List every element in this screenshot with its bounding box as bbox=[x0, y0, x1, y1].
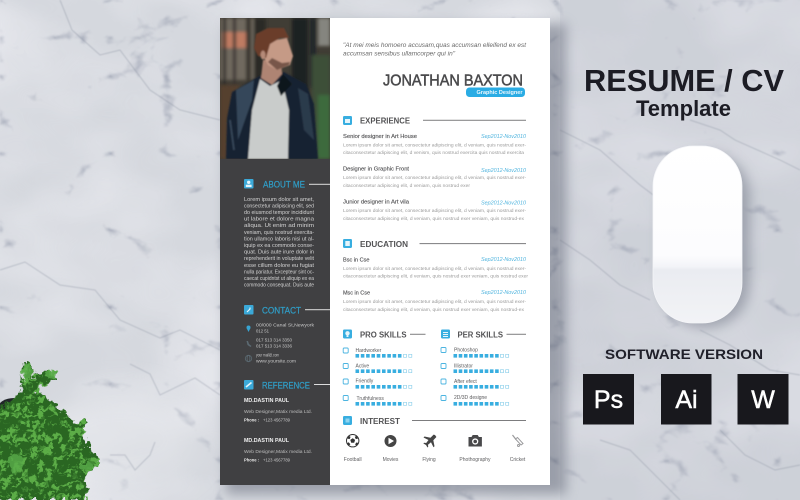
address: 012 51 bbox=[256, 328, 269, 333]
per skill list: Photoshop bbox=[454, 348, 478, 354]
pro skill list: Friendly bbox=[356, 378, 374, 384]
pro skills icon bbox=[343, 330, 352, 338]
per skill list: 2D/3D designe bbox=[454, 395, 487, 401]
job 2: citaconsectetur adipiscing elit, d veniam, quis nostrud exer bbox=[343, 183, 470, 189]
hair bbox=[254, 28, 289, 58]
experience section bbox=[343, 116, 526, 222]
education rule bbox=[420, 242, 526, 245]
about me paragraph: quat. Duis aute irure dolor in bbox=[244, 250, 314, 256]
about me paragraph: reprehenderit in voluptate velit bbox=[244, 256, 315, 262]
phone numbers: 017 513 314 3350 bbox=[256, 338, 292, 343]
face bbox=[262, 38, 293, 70]
badge: illustrator: Ai bbox=[675, 386, 698, 414]
badge: photoshop bbox=[583, 374, 634, 424]
job 1: Sep2012-Nov2010 bbox=[481, 134, 526, 140]
reference entry 2: +123 4567789 bbox=[263, 458, 290, 462]
phone numbers bbox=[256, 338, 292, 348]
mouse shadow bbox=[660, 152, 750, 328]
icon: phone bbox=[246, 341, 252, 347]
resume shadow bbox=[226, 24, 566, 494]
job 2 bbox=[343, 167, 526, 189]
badge: word: W bbox=[751, 386, 775, 414]
degree 2: Lorem ipsum dolor sit amet, consectetur adipiscing elit, d veniam, quis nostrud exer- bbox=[343, 299, 526, 305]
pro skills section bbox=[343, 330, 426, 406]
software version heading: SOFTWARE VERSION bbox=[605, 346, 763, 362]
title: resume / cv: RESUME / CV bbox=[584, 63, 784, 98]
subtitle: template: Template bbox=[636, 96, 731, 121]
about me paragraph: aliqua. Ut enim ad minim bbox=[244, 223, 314, 229]
about me connector bbox=[309, 184, 330, 185]
reference entry 1: +123 4567789 bbox=[263, 418, 290, 422]
about me paragraph: Lorem ipsum dolor sit amet, bbox=[244, 197, 314, 203]
degree 2: citaconsectetur adipiscing elit, d veniam, quis nostrud exer veniam, quis nostrud-ex bbox=[343, 307, 525, 313]
interest labels: Phothography bbox=[459, 457, 491, 463]
degree 1: Sep2012-Nov2010 bbox=[481, 257, 526, 263]
job 2: Sep2012-Nov2010 bbox=[481, 168, 526, 174]
reference connector bbox=[314, 384, 330, 385]
interest labels: Football bbox=[344, 457, 362, 463]
education section bbox=[343, 239, 528, 313]
experience icon bbox=[343, 116, 352, 125]
pro skill list bbox=[343, 348, 412, 406]
collar bbox=[277, 74, 292, 96]
interest labels: Movies bbox=[383, 457, 399, 463]
interest labels: Flying bbox=[422, 457, 436, 463]
email and website bbox=[256, 353, 296, 363]
job title pill: Graphic Designer bbox=[476, 90, 522, 96]
icon: flying bbox=[423, 435, 436, 448]
pro skills heading: PRO SKILLS bbox=[360, 330, 406, 339]
interest labels bbox=[344, 457, 526, 463]
job 2: Designer in Graphic Front bbox=[343, 167, 410, 173]
reference section bbox=[244, 379, 330, 462]
interest rule bbox=[412, 419, 526, 422]
reference entry 1: Phone : bbox=[244, 418, 259, 422]
education icon bbox=[343, 239, 352, 248]
reference entry 1 bbox=[244, 398, 312, 422]
plant bbox=[0, 362, 100, 500]
contact connector bbox=[305, 309, 330, 310]
about me paragraph: veniam, quis nostrud exercita- bbox=[244, 230, 314, 236]
sidebar panel bbox=[220, 159, 330, 485]
job 1: Senior designer in Art House bbox=[343, 134, 417, 140]
icon: white mouse bbox=[653, 146, 742, 323]
neck bbox=[261, 60, 282, 85]
pro skills rule bbox=[410, 333, 426, 336]
job title pill bbox=[466, 88, 525, 97]
interest icon bbox=[343, 416, 352, 425]
about me paragraph bbox=[244, 197, 315, 289]
quote: accumsan sensibus ullamcorper qui in" bbox=[343, 51, 456, 58]
experience heading: EXPERIENCE bbox=[360, 116, 410, 126]
email and website: your mail@.com bbox=[256, 353, 279, 358]
per skills icon bbox=[441, 330, 450, 338]
interest section bbox=[343, 416, 526, 463]
about me paragraph: ut labore et dolore magna bbox=[244, 217, 314, 223]
badge: word bbox=[738, 374, 788, 424]
per skill list: After efect bbox=[454, 379, 477, 385]
job 1: Lorem ipsum dolor sit amet, consectetur adipiscing elit, d veniam, quis nostrud exer- bbox=[343, 142, 526, 148]
icon: location bbox=[246, 326, 250, 332]
icon: movies bbox=[384, 435, 396, 447]
reference entry 2 bbox=[244, 438, 312, 462]
reference entry 1: MD.DASTIN PAUL bbox=[244, 398, 290, 404]
about me heading: ABOUT ME bbox=[263, 179, 305, 190]
interest labels: Cricket bbox=[510, 457, 526, 463]
education heading: EDUCATION bbox=[360, 239, 408, 249]
reference entry 2: Phone : bbox=[244, 458, 259, 462]
address bbox=[256, 323, 315, 333]
job 3: Lorem ipsum dolor sit amet, consectetur adipiscing elit, d veniam, quis nostrud exer- bbox=[343, 208, 526, 214]
email and website: www.yoursite.com bbox=[256, 358, 296, 363]
degree 1: citaconsectetur adipiscing elit, d veniam, quis nostrud exer veniam, quis nostrud exer bbox=[343, 274, 528, 280]
degree 1 bbox=[343, 257, 528, 280]
pro skill list: Truthfulness bbox=[356, 396, 384, 402]
per skills heading: PER SKILLS bbox=[458, 330, 503, 339]
contact section bbox=[244, 304, 330, 363]
icon: football bbox=[346, 434, 359, 447]
reference heading: REFERENCE bbox=[262, 379, 310, 390]
job 1: citaconsectetur adipiscing elit, d venism, quis nostrud exercita quis nostrud exercita bbox=[343, 150, 524, 156]
degree 2: Sep2012-Nov2010 bbox=[481, 290, 526, 296]
job 3 bbox=[343, 200, 526, 222]
reference entry 2: Web Designer,Matix media Ltd. bbox=[244, 449, 312, 454]
contact icon bbox=[244, 305, 254, 314]
about me paragraph: do eiusmod tempor incididunt bbox=[244, 210, 315, 216]
reference icon bbox=[244, 380, 254, 390]
job 3: citaconsectetur adipiscing elit, d veniam, quis nostrud exer veniam, quis nostrud-ex bbox=[343, 216, 525, 222]
pro skill list: Hardworker bbox=[356, 348, 382, 354]
badge: illustrator bbox=[661, 374, 712, 424]
degree 1: Bsc in Cse bbox=[343, 258, 370, 264]
interest heading: INTEREST bbox=[360, 417, 400, 426]
per skills rule bbox=[506, 333, 526, 336]
reference entry 1: Web Designer,Matix media Ltd. bbox=[244, 409, 312, 414]
icon: web bbox=[245, 355, 252, 362]
jacket bbox=[226, 72, 318, 159]
about me paragraph: caecat cupidntst ut aliquip ex ea bbox=[244, 276, 314, 282]
about me paragraph: iquip ex ea commodo conse- bbox=[244, 243, 314, 249]
phone numbers: 017 513 314 3336 bbox=[256, 343, 292, 348]
job 2: Lorem ipsum dolor sit amet, consectetur adipiscing elit, d veniam, quis nostrud exer- bbox=[343, 175, 526, 181]
portrait photo bbox=[220, 18, 330, 159]
about me paragraph: tion ullamco laboris nisi ut al- bbox=[244, 236, 314, 242]
degree 2: Msc in Cse bbox=[343, 291, 370, 297]
reference entry 2: MD.DASTIN PAUL bbox=[244, 438, 290, 444]
t-shirt bbox=[248, 79, 289, 159]
quote bbox=[343, 42, 526, 58]
address: 00/000 Canal St,Newyork bbox=[256, 323, 315, 328]
about me section bbox=[244, 179, 330, 289]
per skill list bbox=[441, 348, 509, 406]
degree 1: Lorem ipsum dolor sit amet, consectetur adipiscing elit, d veniam, quis nostrud exer- bbox=[343, 266, 526, 272]
about me paragraph: esse cillum dolore eu fugiat bbox=[244, 263, 315, 269]
badge: photoshop: Ps bbox=[594, 386, 623, 414]
icon: cricket bbox=[512, 435, 523, 446]
job 1 bbox=[343, 134, 526, 156]
resume sheet bbox=[220, 18, 550, 485]
about me paragraph: consectetur adipiscing elit, sed bbox=[244, 203, 314, 209]
pro skill list: Active bbox=[356, 364, 369, 370]
about me paragraph: nulla pariatur. Excepteur sint oc- bbox=[244, 269, 314, 275]
about me icon bbox=[244, 179, 254, 188]
icon: camera bbox=[468, 435, 482, 446]
experience rule bbox=[423, 119, 526, 122]
per skill list: Illistrator bbox=[454, 364, 473, 370]
quote: "At mei meis homoero accusam,quas accumsan elleifend ex est bbox=[343, 42, 526, 49]
job 3: Sep2012-Nov2010 bbox=[481, 201, 526, 207]
per skills section bbox=[441, 330, 526, 406]
job 3: Junior designer in Art vila bbox=[343, 200, 409, 206]
name: JONATHAN BAXTON bbox=[383, 72, 523, 89]
degree 2 bbox=[343, 290, 526, 313]
about me paragraph: commodo consequat. Duis aute bbox=[244, 283, 314, 289]
contact heading: CONTACT bbox=[262, 304, 301, 315]
